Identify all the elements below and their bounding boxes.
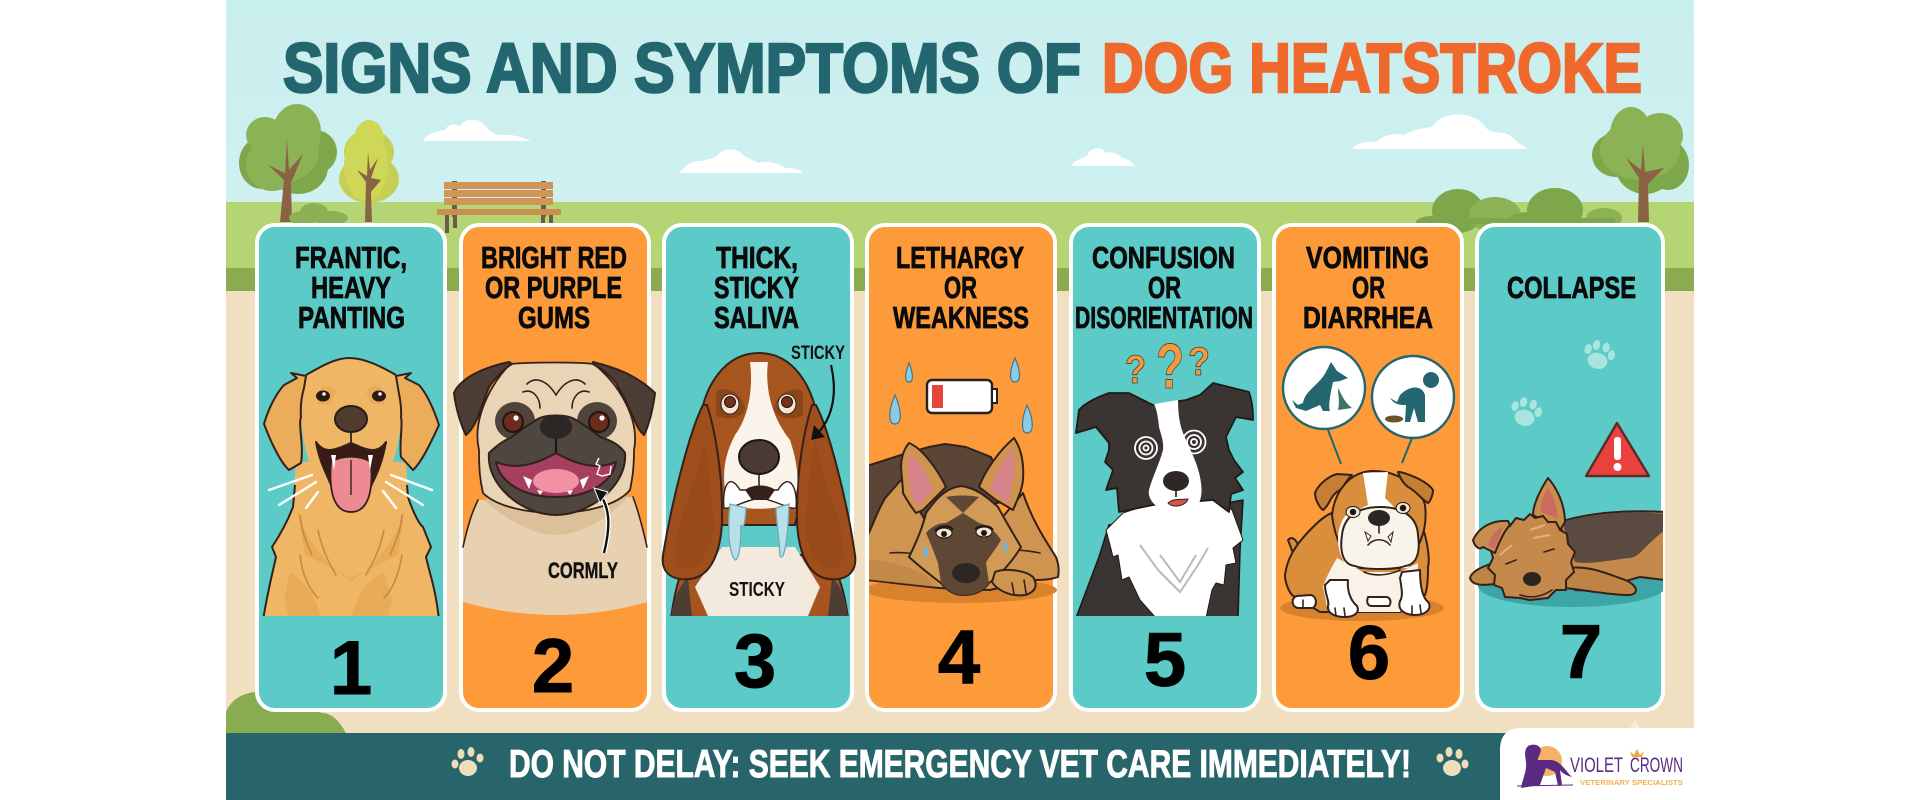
sleeping terrier [1470, 478, 1666, 607]
pug [454, 362, 655, 615]
question marks [1125, 330, 1210, 402]
cloud 2 [680, 149, 803, 173]
tree: right [1592, 107, 1689, 222]
heading 6: DIARRHEA [1303, 300, 1433, 335]
heading 4 [893, 240, 1029, 335]
panel 5: confusion or disorientation [1071, 225, 1259, 710]
footer banner [226, 733, 1526, 800]
panel 7: collapse [1470, 225, 1666, 710]
panel 1: frantic, heavy panting [257, 225, 445, 711]
heading 6 [1303, 240, 1433, 335]
heading 5: DISORIENTATION [1075, 300, 1253, 335]
bubble: vomiting dog [1283, 347, 1365, 464]
paw prints [1507, 337, 1618, 430]
number 5: 5 [1144, 618, 1186, 703]
tree: left small yellow [339, 120, 399, 222]
paw right [1436, 747, 1468, 776]
heading 2: BRIGHT RED [481, 240, 627, 275]
heading 2: GUMS [518, 300, 590, 335]
number 4: 4 [938, 615, 980, 700]
banner text: DO NOT DELAY: SEEK EMERGENCY VET CARE IMMEDIATELY! [509, 743, 1411, 786]
golden retriever [263, 358, 439, 620]
panel 6: vomiting or diarrhea [1274, 225, 1462, 710]
number 1: 1 [330, 626, 372, 711]
panel 4: lethargy or weakness [865, 225, 1059, 710]
bushes right [1416, 188, 1622, 233]
heading 2: OR PURPLE [485, 270, 622, 305]
cloud 4 [1352, 114, 1527, 149]
icon: warning triangle [1586, 423, 1649, 476]
heading 1: FRANTIC, [295, 240, 407, 275]
panel 2: bright red or purple gums [454, 225, 655, 710]
bubble: diarrhea [1372, 356, 1454, 463]
heading 4: OR [944, 270, 977, 305]
heading 5: CONFUSION [1092, 240, 1235, 275]
bush behind card 1 [289, 203, 348, 225]
number 6: 6 [1348, 611, 1390, 696]
paw left [452, 747, 484, 776]
bulldog [1280, 471, 1444, 621]
question marks: ? [1156, 330, 1184, 402]
heading 3: SALIVA [714, 300, 799, 335]
panel 3: thick, sticky saliva [663, 225, 855, 710]
title [283, 29, 1642, 107]
heading 6: OR [1352, 270, 1385, 305]
heading 1: HEAVY [311, 270, 391, 305]
heading 1: PANTING [298, 300, 405, 335]
question marks: ? [1188, 340, 1210, 384]
number 3: 3 [734, 619, 776, 704]
bush bottom left [226, 692, 346, 733]
icon: sweat drops [890, 358, 1032, 433]
heading 7: COLLAPSE [1507, 270, 1636, 305]
icon: low battery [927, 380, 997, 413]
heading 1 [295, 240, 407, 335]
tree: left large [239, 104, 337, 222]
heading 4: LETHARGY [896, 240, 1024, 275]
basset hound [663, 343, 855, 618]
background: park scene [226, 0, 1694, 734]
heading 3: STICKY [714, 270, 799, 305]
heading 2 [481, 240, 627, 335]
pug: CORMLY [548, 558, 618, 583]
logo: Violet Crown Veterinary Specialists: VIOLET [1570, 754, 1623, 777]
number 7: 7 [1560, 610, 1602, 695]
logo: Violet Crown Veterinary Specialists: VETERINARY SPECIALISTS [1580, 778, 1683, 787]
german shepherd [865, 438, 1059, 603]
basset hound: STICKY [729, 579, 786, 601]
title: SIGNS AND SYMPTOMS OF [283, 29, 1081, 107]
heading 3: THICK, [716, 240, 798, 275]
title: DOG HEATSTROKE [1102, 29, 1642, 107]
logo: Violet Crown Veterinary Specialists [1500, 719, 1694, 800]
logo: Violet Crown Veterinary Specialists: CROWN [1630, 754, 1683, 777]
heading 3 [714, 240, 799, 335]
cloud 3 [1071, 148, 1135, 166]
basset hound: STICKY [791, 343, 845, 364]
bench [437, 181, 561, 233]
heading 4: WEAKNESS [893, 300, 1029, 335]
question marks: ? [1125, 348, 1146, 392]
border collie [1076, 383, 1253, 618]
heading 5 [1075, 240, 1253, 335]
cloud 1 [423, 119, 531, 141]
heading 6: VOMITING [1306, 240, 1429, 275]
number 2: 2 [532, 624, 574, 709]
heading 5: OR [1148, 270, 1181, 305]
